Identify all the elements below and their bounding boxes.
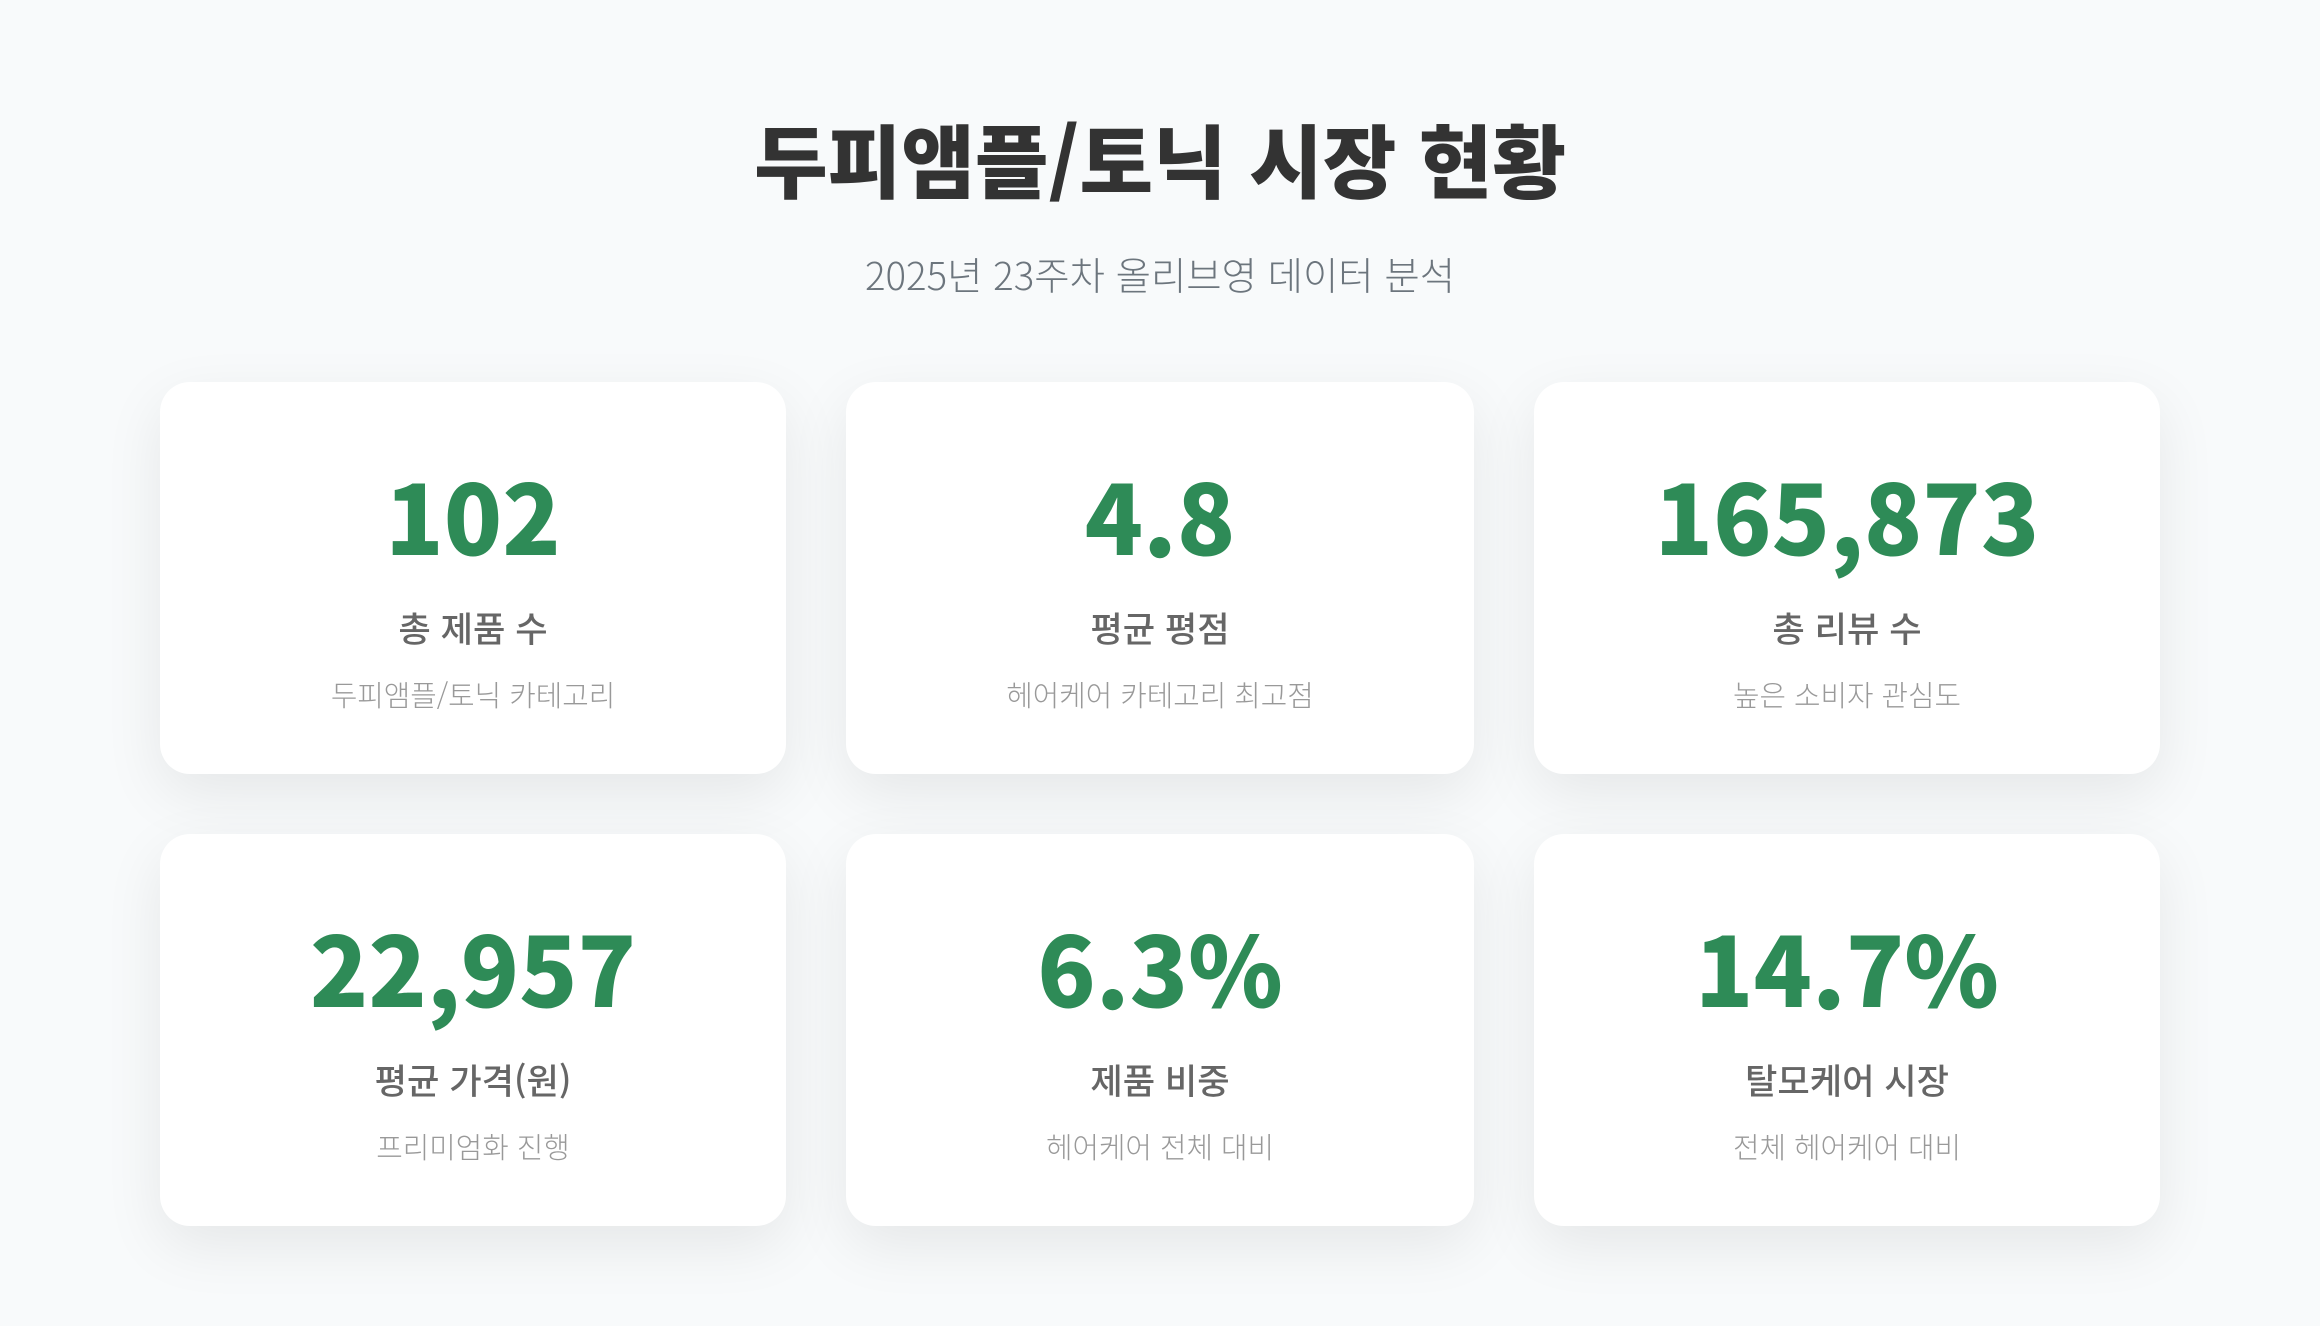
metric description: 두피앰플/토닉 카테고리 <box>331 674 615 715</box>
panel: total reviews <box>1534 382 2160 774</box>
metric value: 165,873 <box>1655 444 2039 583</box>
panel: total products <box>160 382 786 774</box>
metric label: 총 제품 수 <box>398 602 548 653</box>
metric label: 탈모케어 시장 <box>1745 1054 1949 1105</box>
metric description: 헤어케어 전체 대비 <box>1046 1126 1274 1167</box>
metric description: 프리미엄화 진행 <box>376 1126 570 1167</box>
metric label: 평균 평점 <box>1090 602 1230 653</box>
metric label: 총 리뷰 수 <box>1772 602 1922 653</box>
panel: average rating <box>846 382 1474 774</box>
metric value: 14.7% <box>1695 896 1999 1035</box>
metric label: 평균 가격(원) <box>375 1054 571 1105</box>
metric label: 제품 비중 <box>1090 1054 1230 1105</box>
subtitle: 2025년 23주차 올리브영 데이터 분석 <box>865 246 1455 302</box>
metric value: 22,957 <box>310 896 636 1035</box>
panel: hair loss care market <box>1534 834 2160 1226</box>
metric description: 전체 헤어케어 대비 <box>1733 1126 1961 1167</box>
panel: average price <box>160 834 786 1226</box>
metric value: 102 <box>385 444 561 583</box>
metric value: 6.3% <box>1037 896 1283 1035</box>
metric value: 4.8 <box>1085 444 1235 583</box>
title: 두피앰플/토닉 시장 현황 <box>754 100 1566 216</box>
metric description: 헤어케어 카테고리 최고점 <box>1006 674 1314 715</box>
metric description: 높은 소비자 관심도 <box>1733 674 1961 715</box>
panel: product share <box>846 834 1474 1226</box>
